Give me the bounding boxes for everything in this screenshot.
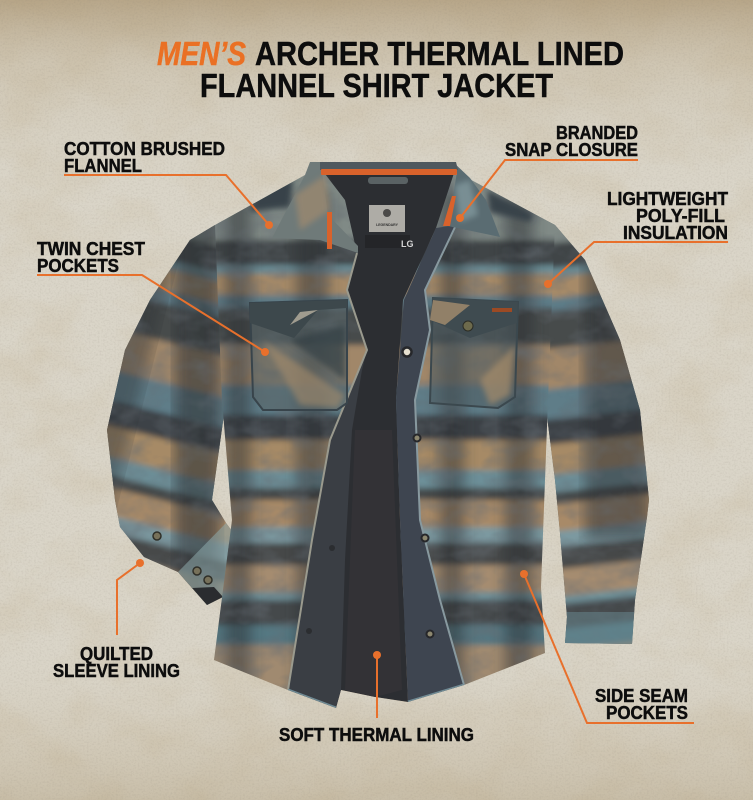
cuff buttons: [153, 532, 212, 584]
callout: cotton brushed flannel: FLANNEL: [64, 155, 142, 176]
callout: cotton brushed flannel: COTTON BRUSHED: [64, 138, 225, 159]
left collar leaf: [272, 162, 358, 253]
left chest pocket: [250, 300, 347, 410]
right sleeve: [541, 218, 649, 644]
size tag: [365, 235, 414, 249]
callout: lightweight poly-fill insulation: LIGHTWEIGHT: [607, 188, 729, 209]
collar: [272, 162, 500, 253]
orange placket tape right: [443, 196, 456, 226]
callout: side seam pockets: POCKETS: [606, 702, 688, 723]
jacket body: [214, 175, 555, 708]
brand label: LEGENDARY: [376, 223, 399, 227]
callout: twin chest pockets: [37, 238, 269, 356]
callout: twin chest pockets: TWIN CHEST: [37, 238, 146, 259]
center thermal panel: [367, 695, 375, 697]
callout: quilted sleeve lining: [53, 559, 180, 681]
flannel shirt jacket: [107, 162, 649, 708]
callout: branded snap closure: BRANDED: [556, 122, 638, 143]
orange collar tape: [321, 169, 457, 175]
callout: side seam pockets: SIDE SEAM: [595, 685, 688, 706]
callout: lightweight poly-fill insulation: INSULATION: [623, 222, 728, 243]
right knit facing: [396, 225, 464, 702]
size tag: LG: [401, 239, 414, 249]
left knit facing: [288, 350, 367, 708]
callout: soft thermal lining: SOFT THERMAL LINING: [279, 724, 474, 745]
brand label: [369, 205, 405, 232]
orange placket tape left: [327, 212, 332, 249]
title line two: FLANNEL SHIRT JACKET: [200, 67, 553, 104]
callout: branded snap closure: SNAP CLOSURE: [505, 139, 638, 160]
title accent: MEN'S: MEN’S: [157, 35, 246, 72]
right collar leaf: [440, 162, 500, 237]
callout: quilted sleeve lining: SLEEVE LINING: [53, 660, 180, 681]
placket highlight edges: [288, 253, 367, 690]
title line one: ARCHER THERMAL LINED: [255, 35, 624, 72]
title: [157, 35, 624, 104]
callout: side seam pockets: [520, 570, 694, 723]
branded tab: [492, 308, 512, 312]
callout: twin chest pockets: POCKETS: [37, 255, 119, 276]
right pocket flap: [430, 298, 518, 338]
callout: soft thermal lining: [279, 651, 474, 745]
dark shoulder yoke: [250, 180, 533, 222]
callout: lightweight poly-fill insulation: [544, 188, 729, 288]
callout: branded snap closure: [456, 122, 638, 222]
left sleeve: [107, 225, 231, 605]
snap buttons: [306, 348, 434, 638]
hanger loop: [368, 177, 408, 184]
callout: quilted sleeve lining: QUILTED: [80, 643, 153, 664]
thermal lining interior: [288, 170, 455, 708]
vertical plaid shading: [225, 190, 533, 710]
left pocket flap: [250, 300, 347, 338]
pocket button: [463, 321, 473, 331]
callout: cotton brushed flannel: [64, 138, 273, 229]
right chest pocket: [430, 298, 518, 408]
callout: lightweight poly-fill insulation: POLY-FILL: [636, 205, 725, 226]
